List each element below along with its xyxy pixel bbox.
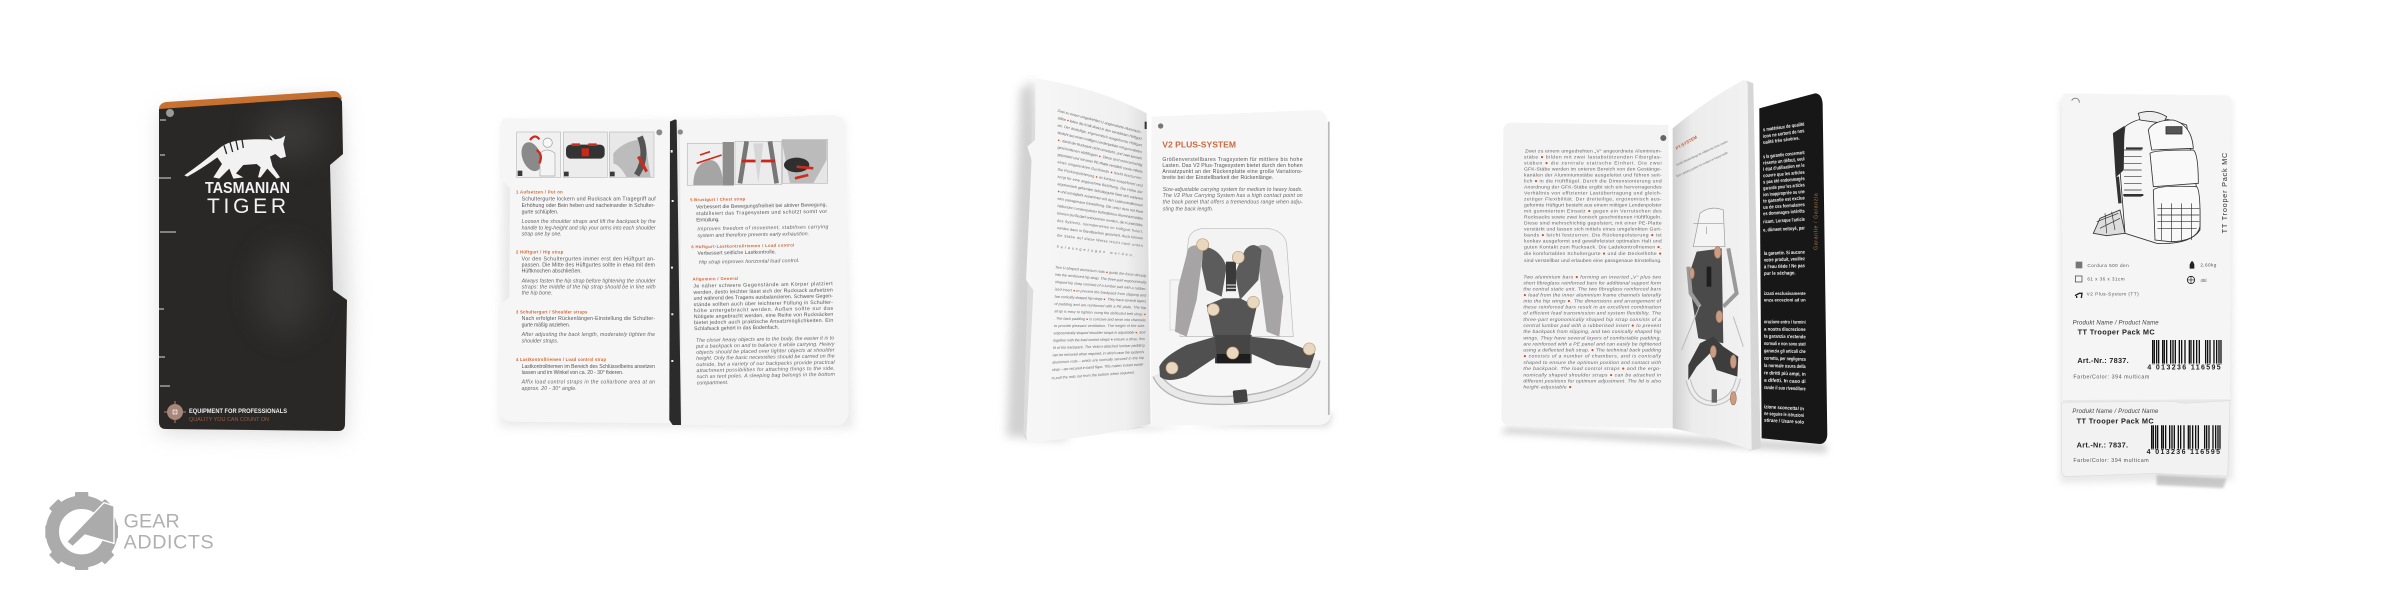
- text: German description: Rucksacks sowie zwei konisch geschnittenen Hüftflügeln.: [1524, 214, 1662, 220]
- text: steps 5 and 6 and general notes: compartment.: [697, 380, 728, 386]
- text: German description: stäben ● die zentrale statische Einheit. Die zwei: [1524, 160, 1662, 166]
- stub label block: Art.-Nr.: 7837.: [2077, 440, 2128, 449]
- text: warranty on black page: stirare / Usare solo: [1764, 418, 1804, 426]
- text: English description: the central static unit. The two fibreglass reinforced bars: [1523, 287, 1661, 293]
- vertical product name: TT Trooper Pack MC: [2220, 152, 2229, 233]
- text: English technical description: fit of the backpack. The Velcro-attached lumbar padding: [1053, 344, 1145, 350]
- right page: [1150, 110, 1331, 425]
- text: steps 5 and 6 and general notes: stabilisiert das Tragesystem und schützt somit vor: [696, 209, 827, 217]
- text: English description: wings. They have several layers of comfortable padding,: [1523, 335, 1661, 341]
- text: German technical description: Die Rückenpolsterung ● ist konkav ausgeformt und: [1057, 167, 1143, 188]
- stub label block: Produkt Name / Product Name: [2072, 409, 2159, 415]
- text: steps 1 to 4: gurte schlüpfen.: [522, 210, 558, 216]
- text: flipped page description: Größe Rückenlänge für mittlere bis hohe Lasten: [1675, 139, 1729, 167]
- text: steps 1 to 4: Always fasten the hip strap before tightening the shoulder: [521, 278, 656, 284]
- spec: dimensions: [2075, 276, 2125, 282]
- text: steps 1 to 4: 4 Lastkontrollriemen / Load control strap: [516, 357, 606, 362]
- text: warranty on black page: s la garantie concernant: [1763, 150, 1805, 160]
- text: English technical description: shaped hip strap consists of a lumbar pad with a rubber-: [1055, 280, 1147, 291]
- text: steps 5 and 6 and general notes: stände sollten auch über leichterer Füllung in Schulter-: [694, 300, 833, 308]
- booklet cover shape: [159, 97, 347, 431]
- text: steps 1 to 4: Lastkontrollriemen im Bereich des Schlüsselbeins ansetzen: [522, 364, 655, 370]
- spec: carrying system: [2075, 292, 2139, 298]
- left page: [1501, 123, 1673, 428]
- text: English description: are reinforced with a PE panel and can easily be tightened: [1523, 341, 1661, 347]
- text: German technical description: ● , damit der Rucksack nicht verrutscht, und zwei konisch: [1057, 138, 1143, 161]
- flipped page: [1673, 80, 1752, 450]
- spec: material: Cordura 500 den: [2087, 263, 2129, 268]
- text: warranty on black page: votre produit, veuillez: [1764, 256, 1805, 264]
- panel: black booklet cover: [159, 91, 350, 436]
- text: warranty on black page: rande il suo rivenditore: [1764, 385, 1806, 392]
- wordmark: ADDICTS: [124, 532, 214, 554]
- text: German technical description: werden dann in Bandlaschen gesichert. Auch können: [1057, 226, 1143, 241]
- text: German technical description: [1057, 109, 1144, 258]
- product label block: Produkt Name / Product Name: [2073, 321, 2159, 327]
- text: English technical description: Two U-shaped aluminium rods ● guide the force directly: [1055, 265, 1148, 278]
- text: warranty on black page: pur le séchage.: [1764, 270, 1796, 277]
- text: steps 5 and 6 and general notes: Hip strap improves horizontal load control.: [699, 258, 800, 266]
- text: German description: geformte Hüftgurt besteht aus einem mittigen Lendenpolster: [1524, 202, 1662, 208]
- text: steps 1 to 4: shoulder straps.: [522, 338, 558, 344]
- text: steps 1 to 4: Schultergurte lockern und Rucksack am Tragegriff auf: [522, 197, 656, 203]
- panel: booklet open at V2 Plus-System: [1007, 78, 1333, 442]
- illustrations: steps 4 to 6: [687, 139, 828, 185]
- text: flipped page description: Size carrying system for medium to heavy loads: [1675, 150, 1729, 178]
- text: steps 1 to 4: strap one by one.: [522, 232, 562, 238]
- text: warranty on black page: te garantie est exclue: [1763, 195, 1805, 205]
- text: steps 5 and 6 and general notes: put a backpack on and to balance it while carrying. Heavy: [695, 341, 835, 350]
- text: German description: Verhältnis von effizienter Lastübertragung und gleich-: [1524, 190, 1662, 196]
- text: steps 1 to 4: Loosen the shoulder straps and lift the backpack by the: [522, 219, 656, 225]
- left page: [497, 118, 672, 423]
- text: English technical description: strap – are secured in band flaps. This makes it even easier: [1052, 362, 1144, 372]
- text: warranty on black page: ualité très sévères.: [1763, 135, 1800, 146]
- text: steps 1 to 4: Hüftknochen abschließen.: [522, 268, 582, 274]
- stitching on spine: [159, 120, 176, 386]
- text: V2 Plus description: sting the back length.: [1163, 206, 1213, 212]
- text: English description: Two aluminium bars ● forming an inverted „V“ plus two: [1523, 275, 1661, 281]
- text: steps 1 to 4: Erhöhung oder Bein heben und nacheinander in Schulter-: [522, 203, 655, 209]
- text: steps 1 to 4: After adjusting the back length, moderately tighten the: [521, 332, 655, 338]
- text: steps 1 to 4: lassen und im Winkel von ca. 20 - 30° fixieren.: [522, 370, 623, 376]
- text: warranty on black page: izione sconcetta! In: [1764, 404, 1804, 412]
- text: steps 1 to 4: handle to leg-height and slip your arms into each shoulder: [522, 225, 656, 231]
- text: English description: height-adjustable ●: [1523, 385, 1572, 391]
- text: steps 5 and 6 and general notes: werden, desto leichter lässt sich der Rucksack aufsetzen: [693, 287, 833, 296]
- text: warranty on black page: a difetti. In caso di: [1764, 378, 1806, 385]
- text: warranty on black page: us de ces formulaires: [1763, 202, 1805, 211]
- text: V2 Plus description: Size-adjustable carrying system for medium to heavy loads.: [1163, 187, 1303, 193]
- text: warranty on black page: l état d'utilisation en le: [1763, 163, 1805, 173]
- text: warranty on black page: ions ne sortent de nos: [1763, 128, 1805, 140]
- wordmark: [124, 510, 214, 554]
- text: English description: ● consists of a number of chambers, and is conically: [1523, 354, 1661, 360]
- text: English description: of efficient load transmission and system flexibility. The: [1523, 311, 1661, 317]
- text: warranty on black page: a nostra discrezione: [1764, 327, 1806, 333]
- text: German description: zeitiger Flexibilität. Der dreiteilige, ergonomisch aus-: [1524, 196, 1662, 202]
- text: English description: ● lead from the inner aluminium frame channels laterally: [1523, 293, 1661, 299]
- text: German technical description: die Stäbe auf diese Weise leicht nach unten: [1057, 233, 1143, 248]
- wordmark: GEAR: [124, 510, 180, 532]
- text: steps 5 and 6 and general notes: Verbessert die Bewegungsfreiheit bei aktiver Bewegung,: [696, 202, 827, 210]
- text: steps 5 and 6 and general notes: Je näher schwere Gegenstände am Körper platziert: [693, 281, 833, 290]
- text: V2 Plus description: the back panel that offers a tremendous range when adju-: [1163, 200, 1303, 206]
- logo wordmark: Tasmanian Tiger: [205, 180, 290, 218]
- spec: material: [2076, 262, 2129, 268]
- text: German technical description: eine passgenaue Einstellung. Die unter dem mit Klett: [1057, 197, 1143, 214]
- text: warranty on black page: couvre que les articles: [1763, 170, 1805, 179]
- text: warranty on black page: re diritti più ampi, in: [1764, 370, 1806, 378]
- text: German description: [1524, 148, 1662, 264]
- text: German technical description: besteht aus einem mittigen Lendenpolster mit gummierten: [1057, 131, 1142, 154]
- badge: equipment for professionals: QUALITY YOU CAN COUNT ON: [189, 417, 269, 423]
- logo: Gear Addicts: [45, 492, 214, 570]
- text: warranty on black page: garanzia gli articoli che: [1764, 348, 1806, 355]
- text: V2 Plus description: Lasten. Das V2 Plus-Tragesystem bietet durch den hohen: [1162, 163, 1303, 169]
- text: steps 5 and 6 and general notes: outside, but a variety of our backpacks provide practical: [696, 360, 836, 368]
- text: German description: guten Kontakt zum Rucksack. Die Ladekontrollriemen ●,: [1524, 245, 1662, 251]
- stub label block: Farbe/Color: 394 multicam: [2073, 458, 2149, 464]
- spec: volume: 45l: [2200, 278, 2207, 283]
- back page in black: [1759, 93, 1827, 444]
- badge: equipment for professionals: [164, 401, 288, 423]
- text: warranty on black page: [1763, 122, 1806, 426]
- text: V2 Plus description: The V2 Plus Carrying System has a high contact point on: [1163, 193, 1303, 199]
- text: German technical description: herausgezogen werden.: [1057, 245, 1135, 258]
- booklet gutter: [669, 119, 681, 425]
- text: steps 5 and 6 and general notes: 5 Brustgurt / Chest strap: [690, 196, 746, 202]
- logo wordmark: Tasmanian Tiger: TIGER: [207, 195, 286, 218]
- text: steps 1 to 4: Nach erfolgter Rückenlängen-Einstellung die Schulter-: [522, 316, 655, 322]
- text: warranty on black page: izzati esclusivamente: [1764, 291, 1806, 297]
- text: English technical description: together with the load control straps ● ensure a close, firm: [1053, 337, 1145, 343]
- tag body: [2062, 93, 2231, 400]
- text: English technical description: [1051, 265, 1148, 380]
- text: German description: lich ● in die Hüftflügel. Durch die Dimensionierung und: [1524, 178, 1662, 184]
- text: English description: short fibreglass reinforced bars for additional support form: [1523, 281, 1661, 287]
- text: German description: Anordnung der GFK-Stäbe ergibt sich ein hervorragendes: [1524, 184, 1662, 190]
- stub barcode: 4 013236 116595: [2147, 449, 2220, 456]
- text: German technical description: haftenden Lendenpolster befindlichen Aluminiumstäbe: [1057, 204, 1143, 221]
- text: German description: Zwei zu einem umgedrehten „V“ angeordnete Aluminium-: [1525, 148, 1662, 154]
- icon: gear with letter G: [45, 492, 118, 570]
- text: warranty on black page: es dommages-intérêts: [1763, 208, 1805, 217]
- text: warranty on black page: à l'eau tiède / Ne pas: [1764, 263, 1805, 270]
- text: warranty on black page: la normale usura della: [1764, 363, 1806, 370]
- text: German technical description: Zwei zu einem umgedrehten U angeordnete Aluminium-: [1057, 109, 1143, 135]
- text: steps 5 and 6 and general notes: Nötigste angebracht werden, eine Reihe von Rucksäcken: [694, 312, 833, 320]
- text: steps 1 to 4: Vor den Schultergurten immer erst den Hüftgurt an-: [522, 256, 655, 262]
- text: steps 5 and 6 and general notes: system and therefore prevents early exhaustion.: [697, 231, 809, 239]
- illustration: V2 Plus carrying system: [1157, 228, 1316, 403]
- text: German description: Diese sind mehrschichtig gepolstert, mit einer PE-Platte: [1524, 220, 1662, 226]
- text: warranty on black page: ne seguire le istruzioni: [1764, 411, 1805, 419]
- product label block: Farbe/Color: 394 multicam: [2073, 375, 2150, 381]
- text: English technical description: can be removed when required, in which case the system's: [1053, 350, 1144, 357]
- text: English technical description: . The back padding ● is concave and sewn into channels: [1054, 317, 1146, 322]
- text: steps 1 to 4: the hip bone.: [522, 291, 552, 297]
- text: warranty on black page: s matériaux de qualité: [1763, 122, 1805, 133]
- spec: volume: [2187, 276, 2207, 284]
- stub label block: TT Trooper Pack MC: [2077, 416, 2154, 425]
- text: English technical description: strap is easy to tighten using the deflected belt strap ●: [1054, 309, 1146, 317]
- barcode: 4 013236 116595: [2147, 364, 2221, 371]
- text: steps 5 and 6 and general notes: Ermüdung.: [696, 217, 720, 223]
- text: warranty on black page: ta garanzia s'estende: [1764, 334, 1806, 340]
- text: German description: GFK-Stäbe werden im unteren Bereich von den Gestänge-: [1524, 166, 1662, 172]
- text: English technical description: aluminium rods – which are normally secured in the hip: [1052, 356, 1144, 365]
- logo wordmark: Tasmanian Tiger: TASMANIAN: [205, 180, 290, 197]
- text: English description: [1523, 275, 1662, 391]
- text: V2 Plus description: Ansatzpunkt an der Rückenplatte eine große Variations-: [1162, 169, 1303, 175]
- right page: [680, 115, 849, 426]
- left page: [1026, 78, 1151, 442]
- spec: dimensions: 61 x 36 x 31cm: [2087, 277, 2125, 282]
- illustration: backpack frame side view: [1682, 208, 1743, 405]
- page edges: [1745, 81, 1761, 451]
- product label block: [2073, 321, 2222, 381]
- text: German technical description: sorgt für eine angenehme Belüftung. Die Höhe der: [1057, 175, 1144, 195]
- text: English description: the backpack from slipping, and two conically shaped hip: [1523, 329, 1661, 335]
- panel: product hang tag: [2060, 93, 2233, 488]
- text: steps 5 and 6 and general notes: Improves freedom of movement, stabilises carrying: [697, 224, 829, 232]
- text: German description: verstärkt und lassen sich mittels eines umgelenkten Gurt-: [1524, 226, 1662, 232]
- text: German description: bands ● leicht festzurren. Die Rückenpolsterung ● ist: [1524, 232, 1662, 238]
- text: steps 1 to 4: straps: the middle of the hip strap should be in line with: [522, 284, 656, 290]
- text: German description: sind verstellbar und erlauben eine passgenaue Einstellung.: [1524, 258, 1662, 264]
- text: German description: die komfortablen Schultergurte ● und die Deckelhöhe ●: [1524, 251, 1662, 257]
- text: German technical description: gepolstert und mit einer PE-Platte verstärkt sowie mittels: [1057, 153, 1143, 174]
- text: German technical description: ● und ermöglicht zusammen mit den Lastkontrollriemen: [1057, 189, 1143, 208]
- text: warranty on black page: ricant. Lorsque l'article: [1763, 217, 1805, 225]
- text: English description: using a deflected belt strap. ● The technical back padding: [1523, 348, 1661, 354]
- label: Garantie / Garanzia: Garantie / Garanzia: [1814, 193, 1820, 250]
- spec: weight: [2190, 261, 2217, 269]
- panel: booklet with back page and flipped page: [1500, 80, 1827, 453]
- text: V2 Plus description: breite bei der Einstellbarkeit der Rückenlänge.: [1162, 175, 1273, 181]
- stub barcode: [2147, 425, 2221, 456]
- text: German technical description: stäbe ● leiten die Kraft direkt in den verstärkten Hüftgurt: [1057, 116, 1142, 141]
- text: English description: the backpack. The load control straps ● and the ergo-: [1523, 366, 1661, 372]
- text: V2 Plus description: Größenverstellbares Tragsystem für mittlere bis hohe: [1162, 157, 1303, 163]
- text: steps 1 to 4: 2 Hüftgurt / Hip strap: [516, 250, 564, 255]
- text: steps 1 to 4: gurte mäßig anziehen.: [522, 322, 570, 328]
- text: warranty on black page: normali e non sono stati: [1764, 341, 1806, 348]
- text: warranty on black page: ion inappropriée ou une: [1763, 189, 1805, 198]
- text: warranty on black page: résente un défaut, seul: [1763, 156, 1805, 167]
- text: steps 5 and 6 and general notes: objects should be placed over lighter objects at shoulder: [696, 347, 835, 356]
- text: English technical description: two conically shaped hip wings ●. They have several layers: [1055, 295, 1147, 303]
- text: warranty on black page: s pas été endommagés: [1763, 176, 1805, 186]
- text: English technical description: to pull the rods out from the bottom when required.: [1051, 370, 1135, 380]
- badge: equipment for professionals: EQUIPMENT FOR PROFESSIONALS: [189, 408, 288, 415]
- text: German technical description: können bei Bedarf entnommen werden, die Kunststäbe: [1057, 211, 1143, 227]
- text: English technical description: of padding and are reinforced with a PE plate. The hip: [1054, 302, 1146, 310]
- illustration: backpack line drawing: [2093, 111, 2200, 243]
- text: steps 5 and 6 and general notes: attachment possibilities for attaching things to the side,: [696, 366, 835, 374]
- text: steps 1 to 4: passen. Die Mitte des Hüftgurtes sollte in etwa mit dem: [522, 263, 655, 269]
- text: steps 5 and 6 and general notes: Allgemein / General: [693, 276, 738, 282]
- product label block: TT Trooper Pack MC: [2078, 327, 2155, 336]
- text: steps 5 and 6 and general notes: höhe untergebracht werden. Außen sollte nur das: [694, 306, 834, 314]
- text: German technical description: eines umgelenkten Gurtbands ● leicht festzurren.: [1057, 160, 1143, 181]
- text: German description: konkav ausgeformt und gewährleistet optimalen Halt und: [1524, 238, 1662, 244]
- text: V2 Plus description: [1162, 157, 1303, 212]
- panel: open booklet with fitting instructions: [497, 115, 853, 428]
- heading: V2 Plus-System: V2 PLUS-SYSTEM: [1162, 139, 1236, 149]
- text: steps 5 and 6 and general notes: Schlafsack gehört in das Bodenfach.: [694, 325, 779, 332]
- logo: thylacine tiger: [184, 135, 286, 179]
- text: English description: three-part ergonomically shaped hip strap consists of a: [1523, 317, 1661, 323]
- text: English technical description: ised insert ● to prevent the backpack from slipping and: [1055, 287, 1147, 298]
- stub label block: [2072, 409, 2221, 464]
- text: warranty on black page: corretto, per negligenza: [1764, 356, 1806, 363]
- barcode: [2147, 340, 2222, 371]
- text: German technical description: geschnittenen Hüftflügeln ●. Diese sind mehrschichtig: [1057, 145, 1143, 167]
- text: steps 5 and 6 and general notes: 6 Hüftgurt-Lastkontrollriemen / Load control: [691, 242, 794, 249]
- text: steps 5 and 6 and general notes: height. Only the basic necessities should be carried on the: [696, 353, 835, 362]
- text: German technical description: ein. Der dreiteilige, ergonomisch ausgeformte Hüftgurt: [1057, 123, 1142, 148]
- text: German description: stäbe ● bilden mit zwei lastabstützenden Fiberglas-: [1524, 154, 1662, 160]
- illustrations: steps 1 to 3: [517, 132, 654, 177]
- text: English description: nomically shaped shoulder straps ● can be attached in: [1523, 372, 1661, 378]
- orange top edge of booklet: [159, 91, 342, 112]
- text: steps 5 and 6 and general notes: Verbessert seitliche Lastkontrolle.: [697, 249, 776, 257]
- text: warranty on black page: enza eccezioni ad un: [1764, 298, 1806, 304]
- text: German technical description: des Systems, normalerweise im Hüftgurt fixiert,: [1057, 219, 1143, 234]
- text: warranty on black page: la garantie. Si aucune: [1764, 250, 1805, 257]
- text: English technical description: to provide pleasant ventilation. The height of the size-: [1054, 324, 1146, 328]
- text: English technical description: into the reinforced hip strap. The three-part ergonomically: [1055, 273, 1148, 285]
- text: steps 5 and 6 and general notes: The closer heavy objects are to the body, the easier it is to: [696, 335, 834, 344]
- text: steps 5 and 6 and general notes: und während des Tragens ausbalancieren. Schwere Gegen-: [694, 293, 833, 302]
- text: German description: mit gummiertem Einsatz ● gegen ein Verrutschen des: [1524, 208, 1662, 214]
- text: steps 1 to 4: approx. 20 - 30° angle.: [522, 386, 577, 392]
- text: warranty on black page: garantie pour les articles: [1763, 182, 1805, 192]
- hip belt: [1157, 360, 1316, 400]
- text: English description: different positions for optimum adjustment. The lid is also: [1523, 378, 1661, 384]
- text: steps 5 and 6 and general notes: [690, 195, 836, 387]
- tear-off stub: [2062, 401, 2230, 477]
- text: steps 5 and 6 and general notes: bietet jedoch auch praktische Ansatzmöglichkeiten. Ein: [694, 318, 833, 326]
- spec: carrying system: V2 Plus-System (TT): [2087, 292, 2139, 297]
- text: English description: into the hip wings ●. The dimensions and arrangement of: [1523, 299, 1662, 305]
- text: steps 5 and 6 and general notes: such as tent poles. A sleeping bag belongs in the bottom: [697, 372, 836, 380]
- text: English description: central lumbar pad with a rubberised insert ● to prevent: [1523, 323, 1662, 329]
- text: steps 1 to 4: 1 Aufsetzen / Put on: [516, 189, 563, 194]
- text: English technical description: ergonomically shaped shoulder straps is adjustable ●, and: [1054, 330, 1146, 335]
- text: English description: shaped to ensure the optimum position and contact with: [1523, 360, 1661, 366]
- text: steps 1 to 4: [516, 189, 656, 392]
- text: warranty on black page: e, dûment nettoyé, par: [1763, 225, 1805, 234]
- text: steps 1 to 4: 3 Schultergurt / Shoulder straps: [516, 309, 588, 314]
- text: steps 1 to 4: Affix load control straps in the collarbone area at an: [521, 379, 655, 385]
- text: German description: kanälen der Aluminiumstäbe ausgeleitet und führen seit-: [1524, 172, 1662, 178]
- spec: weight: 2,60kg: [2200, 263, 2217, 268]
- text: German technical description: ergonomisch geformten Schultergurte lässt sich variieren: [1057, 182, 1143, 201]
- product label block: Art.-Nr.: 7837.: [2077, 356, 2129, 365]
- heading: partially visible system title: PT-SYSTEM: [1675, 134, 1698, 151]
- text: English description: these reinforced bars result in an excellent combination: [1523, 305, 1661, 311]
- text: warranty on black page: orazione entro i termini: [1764, 319, 1806, 326]
